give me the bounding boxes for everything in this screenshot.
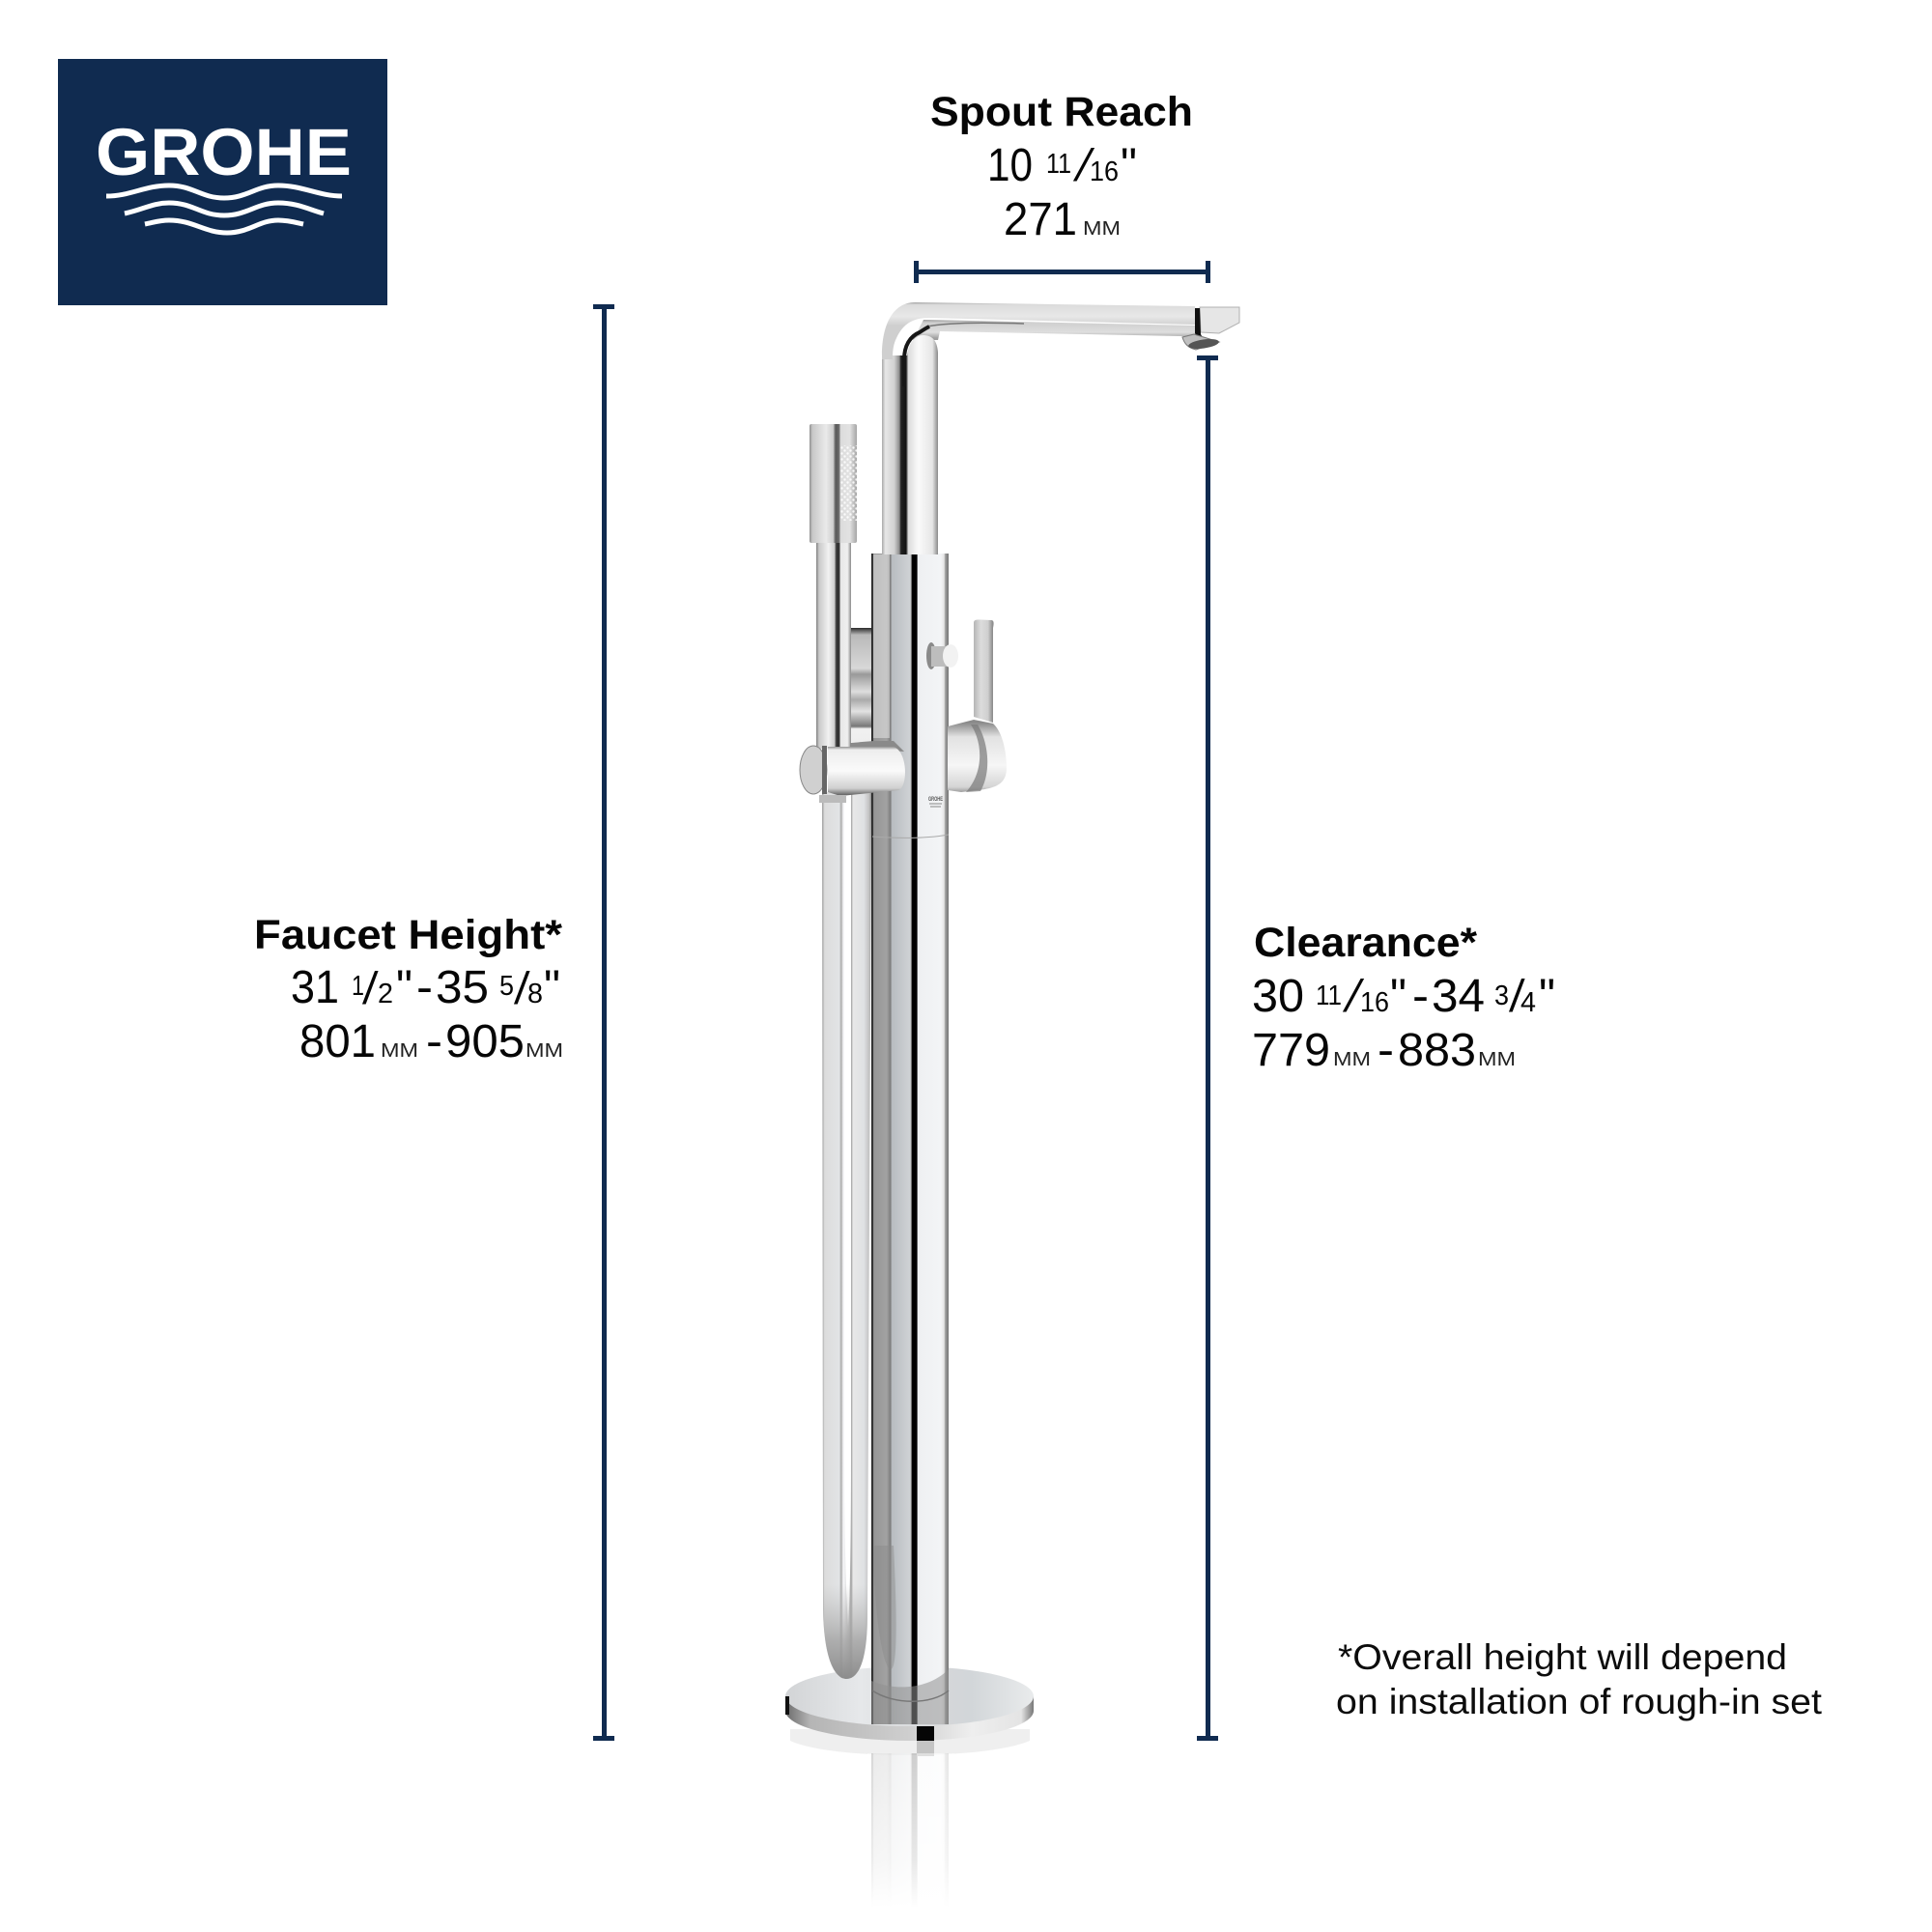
spout upper face — [882, 302, 1195, 359]
spout reach label: 16 — [1090, 156, 1119, 187]
faucet height label: - — [426, 1016, 442, 1067]
clearance label: / — [1508, 970, 1526, 1021]
thin ridge line along spout — [927, 323, 1024, 327]
wall bracket behind hand shower — [851, 628, 874, 742]
clearance label: 779 — [1252, 1025, 1330, 1076]
GROHE logo — [58, 59, 387, 305]
hose holder — [800, 746, 905, 803]
spout reach label: Spout Reach — [930, 89, 1193, 135]
faucet height label: 801 — [299, 1016, 376, 1067]
faucet height label: / — [361, 962, 380, 1013]
faucet height label: MM — [526, 1040, 563, 1062]
faucet illustration — [785, 302, 1239, 1910]
riser and spout — [882, 302, 1239, 554]
clearance label — [1252, 920, 1555, 1076]
faucet height label: 1 — [352, 971, 364, 1002]
reflection below base — [790, 1729, 1030, 1910]
clearance dimension line — [1197, 355, 1218, 1741]
clearance label: " — [1539, 971, 1555, 1022]
footnote — [1336, 1637, 1823, 1721]
spout reach label: / — [1070, 141, 1097, 191]
hand shower head — [810, 424, 857, 543]
spout reach dimension line — [914, 261, 1210, 283]
faucet height label: 31 — [291, 962, 339, 1013]
faucet height label: " — [396, 962, 412, 1013]
GROHE logo: GROHE — [96, 115, 352, 189]
round base plate — [785, 1666, 1034, 1741]
faucet height label: 5 — [499, 971, 514, 1002]
small GROHE mark on column — [928, 797, 943, 807]
arm joining column to hose holder — [850, 741, 904, 752]
push button knob — [926, 642, 958, 669]
faucet height label: - — [416, 962, 433, 1013]
main column — [871, 554, 949, 1724]
small GROHE mark on column: GROHE — [928, 797, 943, 803]
spout reach label: 271 — [1004, 194, 1077, 245]
clearance label: MM — [1333, 1049, 1371, 1070]
hand shower tube — [816, 541, 851, 749]
riser tube — [882, 355, 938, 554]
aerator — [1182, 334, 1219, 351]
faucet height dimension line — [593, 304, 614, 1741]
spout reach label — [930, 89, 1193, 245]
clearance label: - — [1378, 1025, 1394, 1076]
faucet height label: 8 — [527, 979, 543, 1009]
footnote: *Overall height will depend — [1338, 1637, 1787, 1677]
clearance label: MM — [1478, 1049, 1516, 1070]
footnote: on installation of rough-in set — [1336, 1682, 1823, 1721]
clearance label: 34 — [1432, 971, 1485, 1022]
spout reach label: MM — [1083, 218, 1121, 240]
clearance label: Clearance* — [1254, 920, 1477, 966]
clearance label: 883 — [1398, 1025, 1476, 1076]
faucet height label: 35 — [436, 962, 489, 1013]
clearance label: 30 — [1252, 971, 1304, 1022]
spout reach label: 11 — [1046, 149, 1071, 180]
clearance label: / — [1340, 972, 1367, 1022]
faucet height label — [254, 912, 563, 1067]
faucet height label: " — [544, 962, 560, 1013]
hose bottom shading — [823, 1584, 867, 1679]
faucet height label: 2 — [378, 979, 393, 1009]
front tube highlight — [907, 335, 938, 386]
clearance label: 16 — [1360, 987, 1389, 1018]
spout under face — [913, 320, 1195, 340]
dark elbow reflection — [904, 327, 929, 386]
spout reach label: " — [1121, 140, 1137, 191]
clearance label: 4 — [1520, 987, 1536, 1018]
clearance label: " — [1390, 971, 1406, 1022]
flexible hose loop — [822, 792, 871, 1679]
spout reach label: 10 — [987, 140, 1033, 191]
faucet height label: MM — [381, 1040, 418, 1062]
clearance label: 3 — [1494, 980, 1509, 1011]
clearance label: - — [1412, 971, 1429, 1022]
dark seam at tip — [1195, 308, 1204, 339]
faucet height label: 905 — [445, 1016, 525, 1067]
lever handle — [948, 619, 1007, 792]
faucet height label: / — [513, 962, 531, 1013]
spout tip plate — [1200, 307, 1239, 333]
faucet height label: Faucet Height* — [254, 912, 562, 958]
clearance label: 11 — [1316, 980, 1342, 1011]
